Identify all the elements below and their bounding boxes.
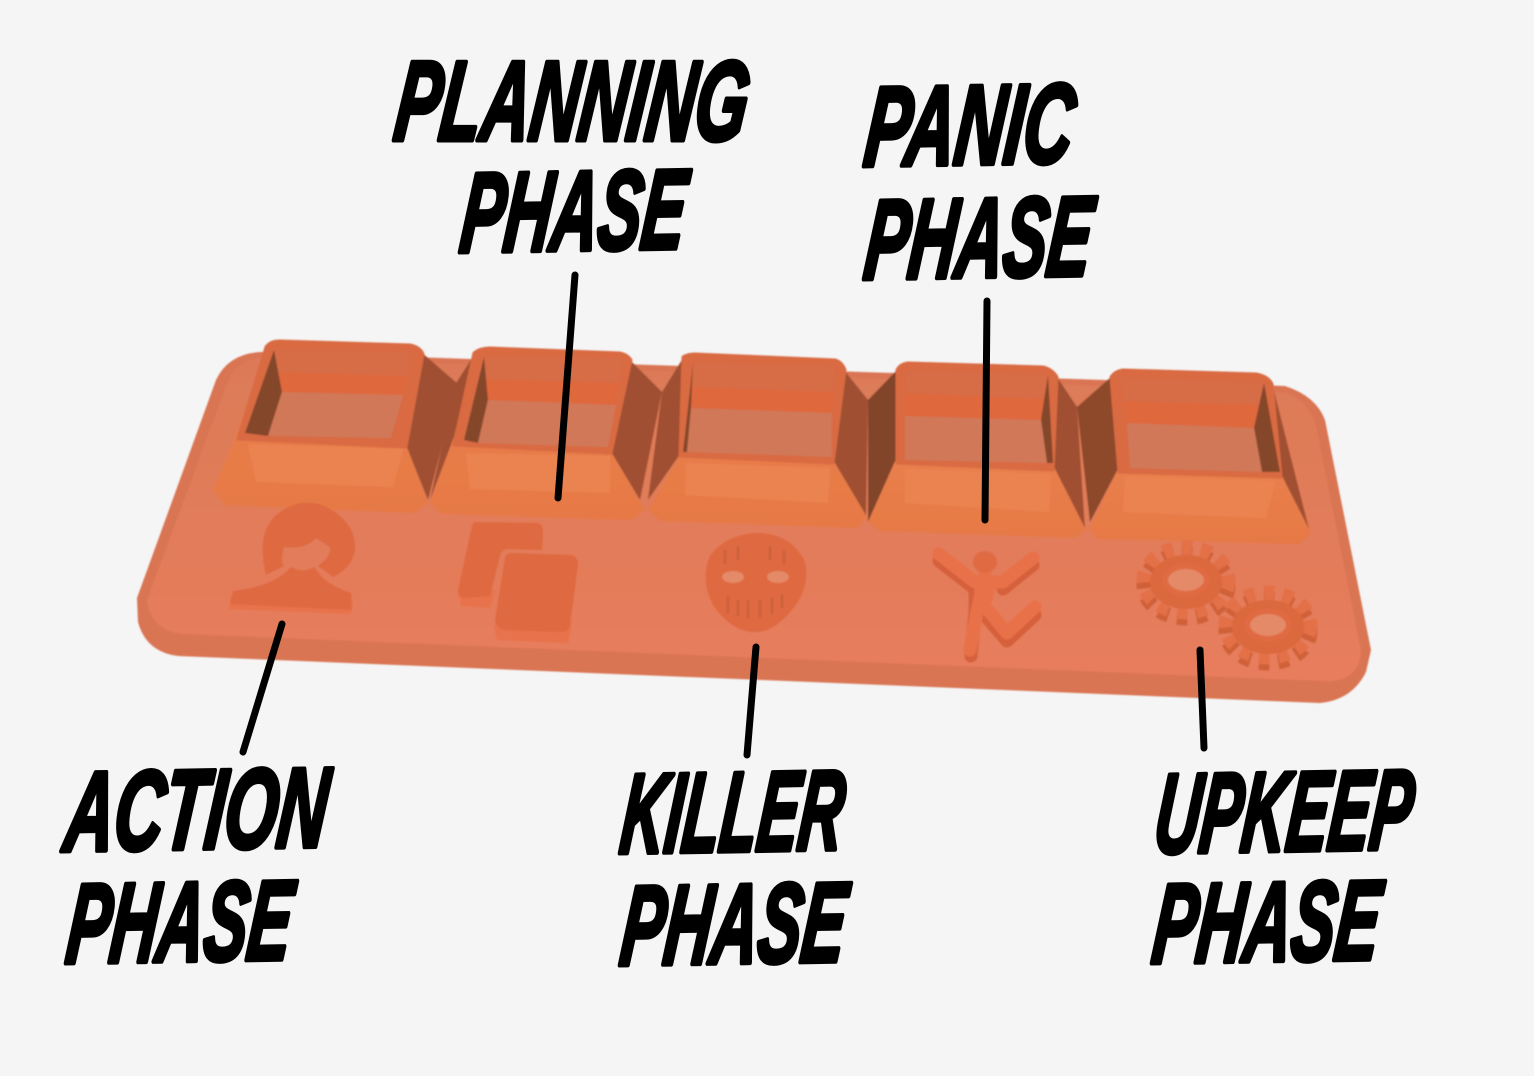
- icon: running figure: [939, 551, 1035, 656]
- icon: cards: [458, 522, 578, 643]
- tray base: [137, 352, 1371, 703]
- recessed box 3: [648, 354, 868, 528]
- orange tray model: [137, 341, 1371, 703]
- label: action phase: [58, 745, 336, 988]
- label: killer phase: PHASE: [615, 859, 855, 990]
- label: panic phase: PHASE: [859, 173, 1101, 304]
- icon: gears: [1144, 548, 1310, 663]
- arrow: planning phase pointer: [558, 275, 575, 498]
- label: killer phase: [615, 747, 855, 990]
- label: panic phase: [859, 61, 1101, 304]
- recessed box 2: [430, 348, 662, 520]
- label: planning phase: PLANNING: [389, 38, 756, 165]
- icon: hockey mask: [706, 533, 806, 632]
- recessed box 4: [868, 363, 1086, 538]
- label: planning phase: [389, 38, 756, 277]
- recessed box 1: [213, 341, 458, 513]
- arrow: upkeep phase pointer: [1200, 650, 1204, 748]
- icon: person: [229, 503, 355, 614]
- arrow: action phase pointer: [243, 624, 282, 752]
- recessed box 5: [1077, 370, 1311, 544]
- label: planning phase: PHASE: [455, 146, 695, 277]
- label: killer phase: KILLER: [615, 747, 851, 878]
- label: upkeep phase: [1147, 747, 1420, 988]
- arrow: killer phase pointer: [747, 647, 756, 755]
- label: panic phase: PANIC: [859, 61, 1082, 191]
- arrow: panic phase pointer: [985, 301, 987, 520]
- label: action phase: PHASE: [61, 857, 301, 988]
- label: action phase: ACTION: [58, 745, 336, 876]
